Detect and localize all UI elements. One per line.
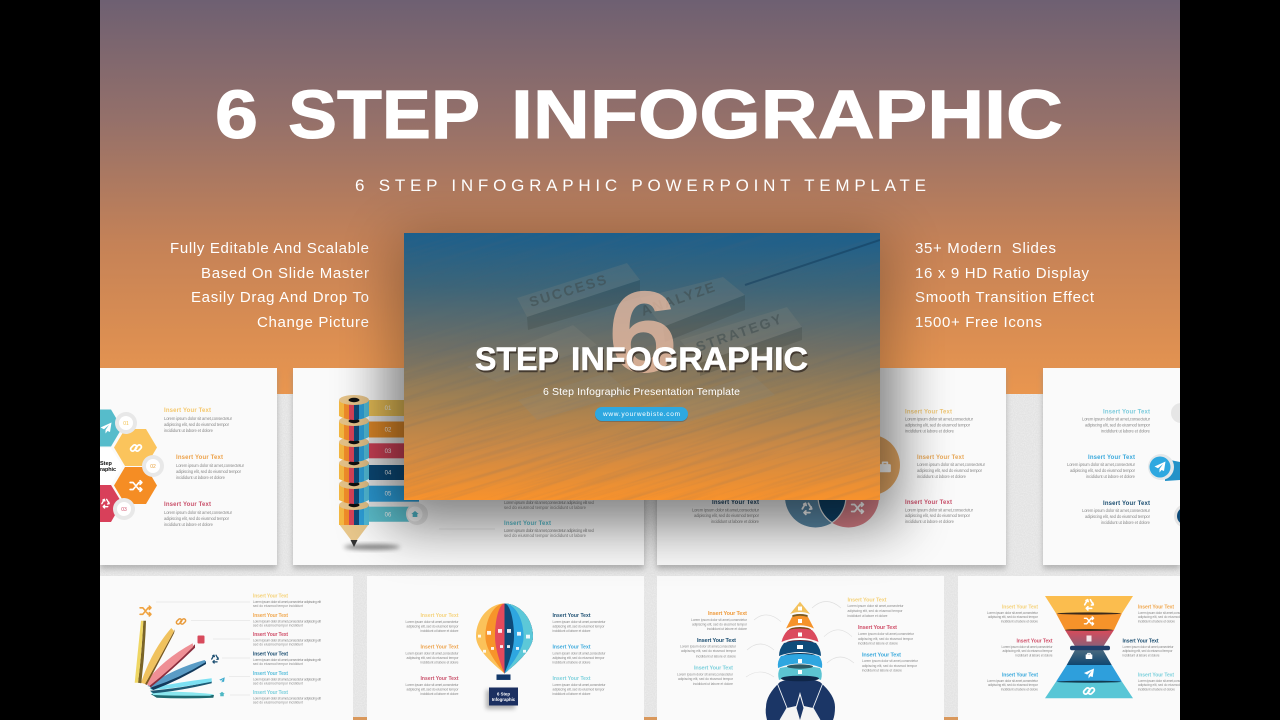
panel: slide rocket <box>657 576 944 720</box>
text blocks right: Lorem ipsum dolor sit amet,consectetur <box>552 620 606 624</box>
text blocks right: incididunt ut labore et dolore <box>862 668 902 672</box>
text block 1 <box>1082 410 1151 434</box>
fan text rows: Lorem ipsum dolor sit amet,consectetur adipiscing elit <box>253 658 321 662</box>
balloon <box>476 604 533 680</box>
text block left <box>692 500 760 524</box>
text blocks left: Insert Your Text <box>1002 604 1038 610</box>
feature list: left: Based On Slide Master <box>201 265 369 282</box>
text block 2: adipiscing elit, sed do eiusmod tempor <box>1070 468 1136 473</box>
number badges <box>113 412 164 520</box>
text blocks right: adipiscing elit, sed do eiusmod tempor <box>552 656 605 660</box>
text block 3: incididunt ut labore et dolore <box>164 522 214 527</box>
text blocks left: adipiscing elit, sed do eiusmod tempor <box>406 656 459 660</box>
text block right 1: Lorem ipsum dolor sit amet,consectetur <box>905 416 974 422</box>
panel: slide pencil <box>293 368 644 565</box>
fan text rows: Insert Your Text <box>253 671 288 677</box>
pencil tabs: 02 <box>385 428 392 434</box>
feature list: right <box>915 240 1095 331</box>
text block 1: Insert Your Text <box>1103 410 1150 416</box>
text blocks right: incididunt ut labore et dolore <box>552 661 591 665</box>
fan text rows: Lorem ipsum dolor sit amet,consectetur adipiscing elit <box>253 696 321 700</box>
leader line <box>439 528 495 530</box>
fan text rows: Insert Your Text <box>253 613 288 619</box>
title: STEP <box>288 76 480 153</box>
panel: slide balloon <box>367 576 644 720</box>
text block: Insert Your Text <box>504 521 551 527</box>
fan text rows: Insert Your Text <box>253 652 288 658</box>
panel: slide fan <box>100 576 353 720</box>
text block 3: adipiscing elit, sed do eiusmod tempor <box>1085 514 1151 519</box>
fan text rows: sed do eiusmod tempor incididunt <box>253 604 303 608</box>
hexagon cluster: raphic <box>100 467 116 473</box>
text block 2: Lorem ipsum dolor sit amet,consectetur <box>1067 462 1136 467</box>
text block 3: incididunt ut labore et dolore <box>1101 520 1151 525</box>
fan text rows <box>253 594 321 705</box>
text block left: incididunt ut labore et dolore <box>711 519 760 524</box>
text block: Lorem ipsum dolor sit amet,consectetur adipiscing elit sed <box>504 500 595 505</box>
text blocks right: adipiscing elit, sed do eiusmod <box>1138 615 1180 619</box>
text blocks right: incididunt ut labore et dolore <box>858 642 898 646</box>
text blocks left: Insert Your Text <box>708 611 747 617</box>
pencil tabs: 06 <box>385 512 392 518</box>
cover heading: STEP <box>475 341 559 377</box>
text block right 3: adipiscing elit, sed do eiusmod tempor <box>905 513 971 518</box>
text block right 3: Insert Your Text <box>905 500 952 506</box>
text blocks left: incididunt ut labore et dolore <box>420 629 459 633</box>
pencil tabs <box>369 400 419 522</box>
text blocks right: adipiscing elit, sed do eiusmod tempor <box>858 637 914 641</box>
wood texture <box>404 239 880 500</box>
text blocks left: incididunt ut labore et dolore <box>1016 654 1053 658</box>
panel: slide venn <box>657 368 1006 565</box>
text blocks right: incididunt ut labore et dolore <box>1138 620 1175 624</box>
text block right 2: adipiscing elit, sed do eiusmod tempor <box>917 468 983 473</box>
number badges: 01 <box>123 421 129 427</box>
text blocks left: incididunt ut labore et dolore <box>693 682 733 686</box>
feature list: left <box>170 240 369 331</box>
text blocks right: incididunt ut labore et dolore <box>1122 654 1160 658</box>
connector arcs <box>746 602 854 677</box>
text block right 1: incididunt ut labore et dolore <box>905 428 955 434</box>
text blocks left: Insert Your Text <box>694 666 733 672</box>
text blocks right: incididunt ut labore et dolore <box>552 629 591 633</box>
text block left: Lorem ipsum dolor sit amet,consectetur <box>692 508 760 512</box>
text block 3: Insert Your Text <box>164 502 211 508</box>
text blocks left <box>677 611 748 686</box>
text blocks left: incididunt ut labore et dolore <box>1001 620 1038 624</box>
text block right 1: adipiscing elit, sed do eiusmod tempor <box>905 422 971 428</box>
wood texture: SUCCESS <box>527 271 610 310</box>
fan text rows: sed do eiusmod tempor incididunt <box>253 682 303 686</box>
text blocks left: Lorem ipsum dolor sit amet,consectetur <box>1002 645 1053 649</box>
text blocks left <box>987 604 1053 692</box>
text blocks left: incididunt ut labore et dolore <box>696 654 736 658</box>
text block 1: adipiscing elit, sed do eiusmod tempor <box>164 422 230 427</box>
text block 2 <box>176 455 245 480</box>
panel: center cover slide <box>404 233 880 500</box>
text blocks left: Lorem ipsum dolor sit amet,consectetur <box>406 683 459 687</box>
fan text rows: sed do eiusmod tempor incididunt <box>253 701 303 705</box>
text block 1: incididunt ut labore et dolore <box>164 428 214 433</box>
pencil tabs: 01 <box>385 406 392 412</box>
panel: slide hourglass <box>958 576 1180 720</box>
feature list: right: 35+ Modern Slides <box>915 240 1056 257</box>
text blocks left: Lorem ipsum dolor sit amet,consectetur <box>406 620 459 624</box>
text blocks right: Insert Your Text <box>552 645 591 651</box>
text blocks left: Lorem ipsum dolor sit amet,consectetur <box>987 679 1039 683</box>
fan text rows: Lorem ipsum dolor sit amet,consectetur adipiscing elit <box>253 638 321 642</box>
fan chart <box>135 621 214 698</box>
hexagon cluster <box>79 410 157 522</box>
text blocks right: incididunt ut labore et dolore <box>848 614 888 618</box>
text blocks left: Lorem ipsum dolor sit amet,consectetur <box>406 652 459 656</box>
fan icons <box>140 606 225 696</box>
text block 2 <box>1067 455 1136 479</box>
text blocks right: Insert Your Text <box>1122 638 1159 644</box>
venn diagram <box>785 434 900 528</box>
text blocks right: Lorem ipsum dolor sit amet,consectetur <box>858 632 915 636</box>
text blocks left: adipiscing elit, sed do eiusmod tempor <box>406 688 459 692</box>
fan text rows: Insert Your Text <box>253 690 288 696</box>
cover heading: INFOGRAPHIC <box>571 341 808 377</box>
text blocks left: Lorem ipsum dolor sit amet,consectetur <box>987 611 1039 615</box>
text block left: adipiscing elit, sed do eiusmod tempor <box>694 513 760 518</box>
text block: Lorem ipsum dolor sit amet,consectetur adipiscing elit sed <box>504 528 595 533</box>
text block right 2: Lorem ipsum dolor sit amet,consectetur <box>917 462 986 467</box>
text blocks right: Insert Your Text <box>848 598 887 604</box>
button <box>595 407 688 422</box>
text blocks right: Insert Your Text <box>552 613 591 619</box>
fan text rows: sed do eiusmod tempor incididunt <box>253 643 303 647</box>
rocket <box>766 602 835 720</box>
text block 3 <box>1082 501 1151 525</box>
text blocks left: Insert Your Text <box>1002 672 1038 678</box>
text blocks right: Insert Your Text <box>858 625 897 631</box>
fan text rows: sed do eiusmod tempor incididunt <box>253 624 303 628</box>
text blocks right: Lorem ipsum dolor sit amet,consectetur <box>862 659 919 663</box>
text blocks right: Insert Your Text <box>1138 672 1174 678</box>
text block left: Insert Your Text <box>712 500 759 506</box>
fan text rows: Insert Your Text <box>253 594 288 600</box>
text blocks left: Lorem ipsum dolor sit amet,consectetur <box>691 618 748 622</box>
subtitle: 6 STEP INFOGRAPHIC POWERPOINT TEMPLATE <box>355 176 926 195</box>
text block 1: Insert Your Text <box>164 408 211 414</box>
text blocks right: adipiscing elit, sed do eiusmod <box>1138 683 1180 687</box>
big number 6: 6 <box>608 267 678 397</box>
text blocks left: incididunt ut labore et dolore <box>1001 688 1038 692</box>
cover heading <box>475 341 809 379</box>
text block right 3 <box>905 500 974 524</box>
text block 2: Insert Your Text <box>176 455 223 461</box>
text blocks right: adipiscing elit, sed do eiusmod tempor <box>552 624 605 628</box>
panel: slide right <box>1043 368 1198 565</box>
wood texture: ANALYZE <box>639 278 719 319</box>
text blocks left: Insert Your Text <box>1016 638 1053 644</box>
balloon label box: 6 Step <box>497 692 510 696</box>
cover heading: STEP <box>476 343 560 379</box>
text blocks right: adipiscing elit, sed do eiusmod tempor <box>1122 649 1173 653</box>
cover heading: INFOGRAPHIC <box>572 343 809 379</box>
feature list: left: Fully Editable And Scalable <box>170 240 369 257</box>
text blocks right: Insert Your Text <box>862 652 901 658</box>
text blocks left: incididunt ut labore et dolore <box>420 661 459 665</box>
text block 2: Lorem ipsum dolor sit amet,consectetur <box>176 463 245 468</box>
text blocks left: adipiscing elit, sed do eiusmod tempor <box>678 677 734 681</box>
text blocks left: Lorem ipsum dolor sit amet,consectetur <box>677 672 734 676</box>
pencil <box>339 395 400 550</box>
fan text rows: Lorem ipsum dolor sit amet,consectetur adipiscing elit <box>253 600 321 604</box>
card drop shadows <box>100 372 1180 569</box>
feature list: right: 1500+ Free Icons <box>915 314 1042 331</box>
text blocks left: Lorem ipsum dolor sit amet,consectetur <box>680 644 737 648</box>
balloon label box <box>486 688 518 709</box>
text blocks left: adipiscing elit, sed do eiusmod tempor <box>692 622 748 626</box>
text blocks left: Insert Your Text <box>420 645 459 651</box>
text blocks right: Lorem ipsum dolor sit amet,cons <box>1138 679 1180 683</box>
text block right 2: incididunt ut labore et dolore <box>917 474 967 479</box>
text blocks right: incididunt ut labore et dolore <box>1138 688 1175 692</box>
text blocks right: incididunt ut labore et dolore <box>552 692 591 696</box>
pencil tabs: 05 <box>385 492 392 498</box>
badge: home <box>406 503 428 525</box>
text blocks right: Lorem ipsum dolor sit amet,consectetur <box>552 683 606 687</box>
fan text rows: Lorem ipsum dolor sit amet,consectetur adipiscing elit <box>253 677 321 681</box>
hourglass <box>1045 596 1133 698</box>
text block 3: Lorem ipsum dolor sit amet,consectetur <box>164 510 233 515</box>
text block 1: Lorem ipsum dolor sit amet,consectetur <box>1082 416 1151 422</box>
text blocks right: adipiscing elit, sed do eiusmod tempor <box>552 688 605 692</box>
text blocks left: adipiscing elit, sed do eiusmod tempor <box>1002 649 1053 653</box>
feature list: left: Easily Drag And Drop To <box>191 289 369 306</box>
text block right 3: incididunt ut labore et dolore <box>905 519 955 524</box>
text blocks right <box>552 613 606 696</box>
fan text rows: sed do eiusmod tempor incididunt <box>253 662 303 666</box>
fan text rows: Lorem ipsum dolor sit amet,consectetur adipiscing elit <box>253 619 321 623</box>
feature list: left: Change Picture <box>257 314 369 331</box>
hexagon cluster: Step <box>100 461 113 467</box>
text blocks right: adipiscing elit, sed do eiusmod tempor <box>848 609 903 613</box>
text block: sed do eiusmod tempor incididunt ut labore <box>504 533 587 538</box>
text block 1: adipiscing elit, sed do eiusmod tempor <box>1085 422 1151 428</box>
fan text rows: Insert Your Text <box>253 632 288 638</box>
text blocks left: adipiscing elit, sed do eiusmod tempor <box>681 649 737 653</box>
text blocks left: Insert Your Text <box>697 638 736 644</box>
text blocks right: Lorem ipsum dolor sit amet,consectetur <box>848 604 904 608</box>
text block 2: adipiscing elit, sed do eiusmod tempor <box>176 469 242 474</box>
text blocks left: adipiscing elit, sed do eiusmod tempor <box>988 615 1039 619</box>
balloon label box: Infographic <box>492 697 516 702</box>
number badges: 02 <box>150 464 156 470</box>
title: INFOGRAPHIC <box>511 76 1063 153</box>
text block <box>504 500 595 538</box>
text blocks left: Insert Your Text <box>420 676 459 682</box>
text blocks left: Insert Your Text <box>420 613 459 619</box>
title <box>215 76 1063 153</box>
text blocks right: Insert Your Text <box>552 676 591 682</box>
text blocks right: Insert Your Text <box>1138 604 1174 610</box>
text block right 3: Lorem ipsum dolor sit amet,consectetur <box>905 508 974 512</box>
text block 2: Insert Your Text <box>1088 455 1135 461</box>
number badges: 03 <box>121 507 127 513</box>
title: 6 <box>215 76 258 153</box>
text blocks right: Lorem ipsum dolor sit amet,consectetur <box>552 652 606 656</box>
panel: slide hexagon <box>79 368 277 565</box>
feature list: right: Smooth Transition Effect <box>915 289 1095 306</box>
leader lines <box>156 602 250 695</box>
text block 1: Lorem ipsum dolor sit amet,consectetur <box>164 416 233 421</box>
text blocks left: adipiscing elit, sed do eiusmod tempor <box>406 624 459 628</box>
wood texture: STRATEGY <box>694 310 785 355</box>
text block 2: incididunt ut labore et dolore <box>1086 474 1136 479</box>
text block right 2: Insert Your Text <box>917 455 964 461</box>
pencil tabs: 04 <box>385 470 392 476</box>
text blocks left: incididunt ut labore et dolore <box>420 692 459 696</box>
text blocks right: Lorem ipsum dolor sit amet,consectetur <box>1122 645 1174 649</box>
text block 1: incididunt ut labore et dolore <box>1101 428 1151 434</box>
text blocks right <box>848 598 919 672</box>
overlay soft shadow <box>385 236 899 530</box>
text block right 2 <box>917 455 986 479</box>
text blocks right <box>1122 604 1180 692</box>
text blocks right: adipiscing elit, sed do eiusmod tempor <box>862 664 918 668</box>
text block 3: Lorem ipsum dolor sit amet,consectetur <box>1082 508 1151 513</box>
text block right 1: Insert Your Text <box>905 410 952 416</box>
text block right 1 <box>905 410 974 434</box>
button: www.yourwebiste.com <box>602 411 680 418</box>
text block 1 <box>164 408 233 433</box>
cover subtitle: 6 Step Infographic Presentation Template <box>543 386 740 398</box>
feature list: right: 16 x 9 HD Ratio Display <box>915 265 1090 282</box>
text blocks left: incididunt ut labore et dolore <box>707 627 747 631</box>
text block 3 <box>164 502 233 527</box>
text block: sed do eiusmod tempor incididunt ut labore <box>504 505 587 510</box>
text block 3: adipiscing elit, sed do eiusmod tempor <box>164 516 230 521</box>
text block 2: incididunt ut labore et dolore <box>176 475 226 480</box>
pencil tabs: 03 <box>385 449 392 455</box>
text block 3: Insert Your Text <box>1103 501 1150 507</box>
text blocks left: adipiscing elit, sed do eiusmod tempor <box>988 683 1039 687</box>
icon badges <box>1148 403 1198 528</box>
text blocks right: Lorem ipsum dolor sit amet,cons <box>1138 611 1180 615</box>
text blocks left <box>406 613 459 696</box>
